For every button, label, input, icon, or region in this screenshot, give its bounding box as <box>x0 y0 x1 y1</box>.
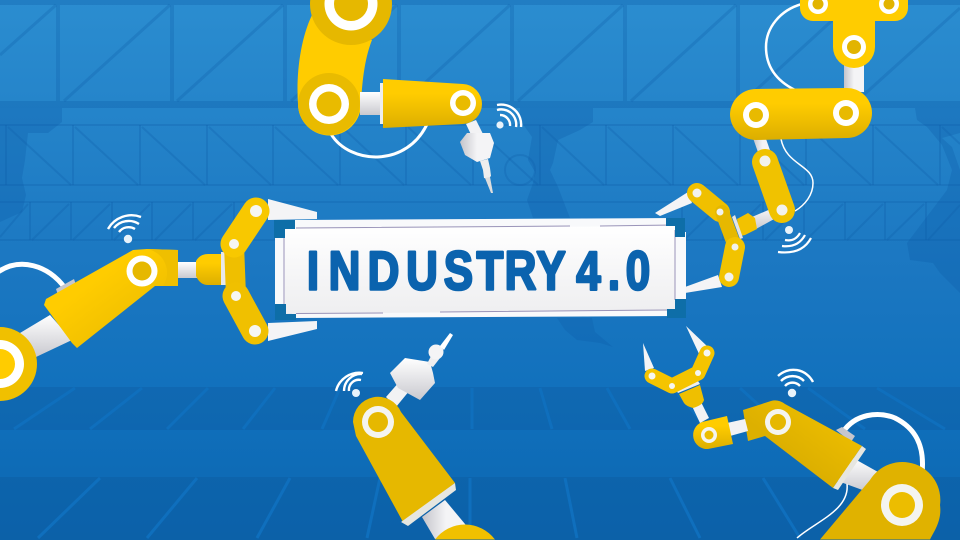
big cable <box>766 4 802 90</box>
robot arm: left <box>0 199 317 401</box>
main bar <box>730 88 872 140</box>
gripper fingers <box>268 199 317 220</box>
wrist shaft <box>727 419 748 436</box>
tool shaft <box>386 381 410 407</box>
wifi icon: bottom center arm <box>336 373 363 397</box>
plaque corner brackets <box>274 220 295 238</box>
upper arm <box>298 15 372 136</box>
gripper neck <box>679 385 704 408</box>
gripper fingers <box>655 192 692 216</box>
elbow joint <box>298 73 360 135</box>
thin cable <box>781 139 813 211</box>
wifi icon: bottom right arm <box>778 370 813 397</box>
plaque thin outline <box>284 225 675 314</box>
gripper links <box>652 353 707 386</box>
shaft to base <box>20 315 72 357</box>
forearm <box>353 397 455 522</box>
background: factory floor tiles <box>0 387 960 540</box>
wrist joint <box>693 416 733 449</box>
cable <box>331 122 428 157</box>
gripper neck shaft <box>691 400 709 423</box>
base joint <box>0 327 37 401</box>
neck shaft <box>178 262 198 278</box>
wrist shaft <box>752 205 785 229</box>
base joint <box>820 462 940 540</box>
gripper neck <box>196 254 221 285</box>
drill tool body <box>390 358 435 400</box>
wrist link <box>765 162 782 210</box>
shaft <box>360 92 382 115</box>
robot arm: top right <box>655 0 908 293</box>
shoulder joint <box>310 0 392 45</box>
gripper neck <box>737 213 757 236</box>
background: factory truss silhouette <box>0 0 960 240</box>
background: faint ring <box>505 155 535 185</box>
shaft to base <box>835 458 878 492</box>
T joint <box>800 0 908 68</box>
big cable <box>843 415 923 473</box>
wifi icon: top center arm <box>496 105 521 129</box>
title text: INDUSTRY 4.0 <box>307 240 650 302</box>
base joint <box>435 524 495 540</box>
shaft <box>844 62 864 92</box>
cable connector <box>836 427 855 442</box>
gripper fingers <box>643 343 654 371</box>
plaque: Industry 4.0 <box>274 218 686 320</box>
gripper links <box>697 193 720 212</box>
forearm <box>383 79 482 128</box>
thin cable <box>797 484 847 538</box>
lower shaft <box>753 136 772 158</box>
wifi icon: top right arm <box>778 226 811 252</box>
drill tool <box>466 120 484 141</box>
cable <box>0 264 65 288</box>
forearm <box>743 400 862 488</box>
lower shaft <box>422 500 470 539</box>
forearm <box>44 249 178 348</box>
robot arm: top center <box>298 0 494 193</box>
background: robot silhouettes <box>0 108 960 347</box>
plaque white base <box>275 218 686 318</box>
robot arm: bottom right <box>643 326 940 540</box>
gripper body <box>234 244 236 296</box>
cable connector <box>56 279 76 295</box>
robot arm: bottom center <box>353 333 495 540</box>
wifi icon: left arm <box>108 215 141 243</box>
plaque inner panel <box>285 226 675 314</box>
